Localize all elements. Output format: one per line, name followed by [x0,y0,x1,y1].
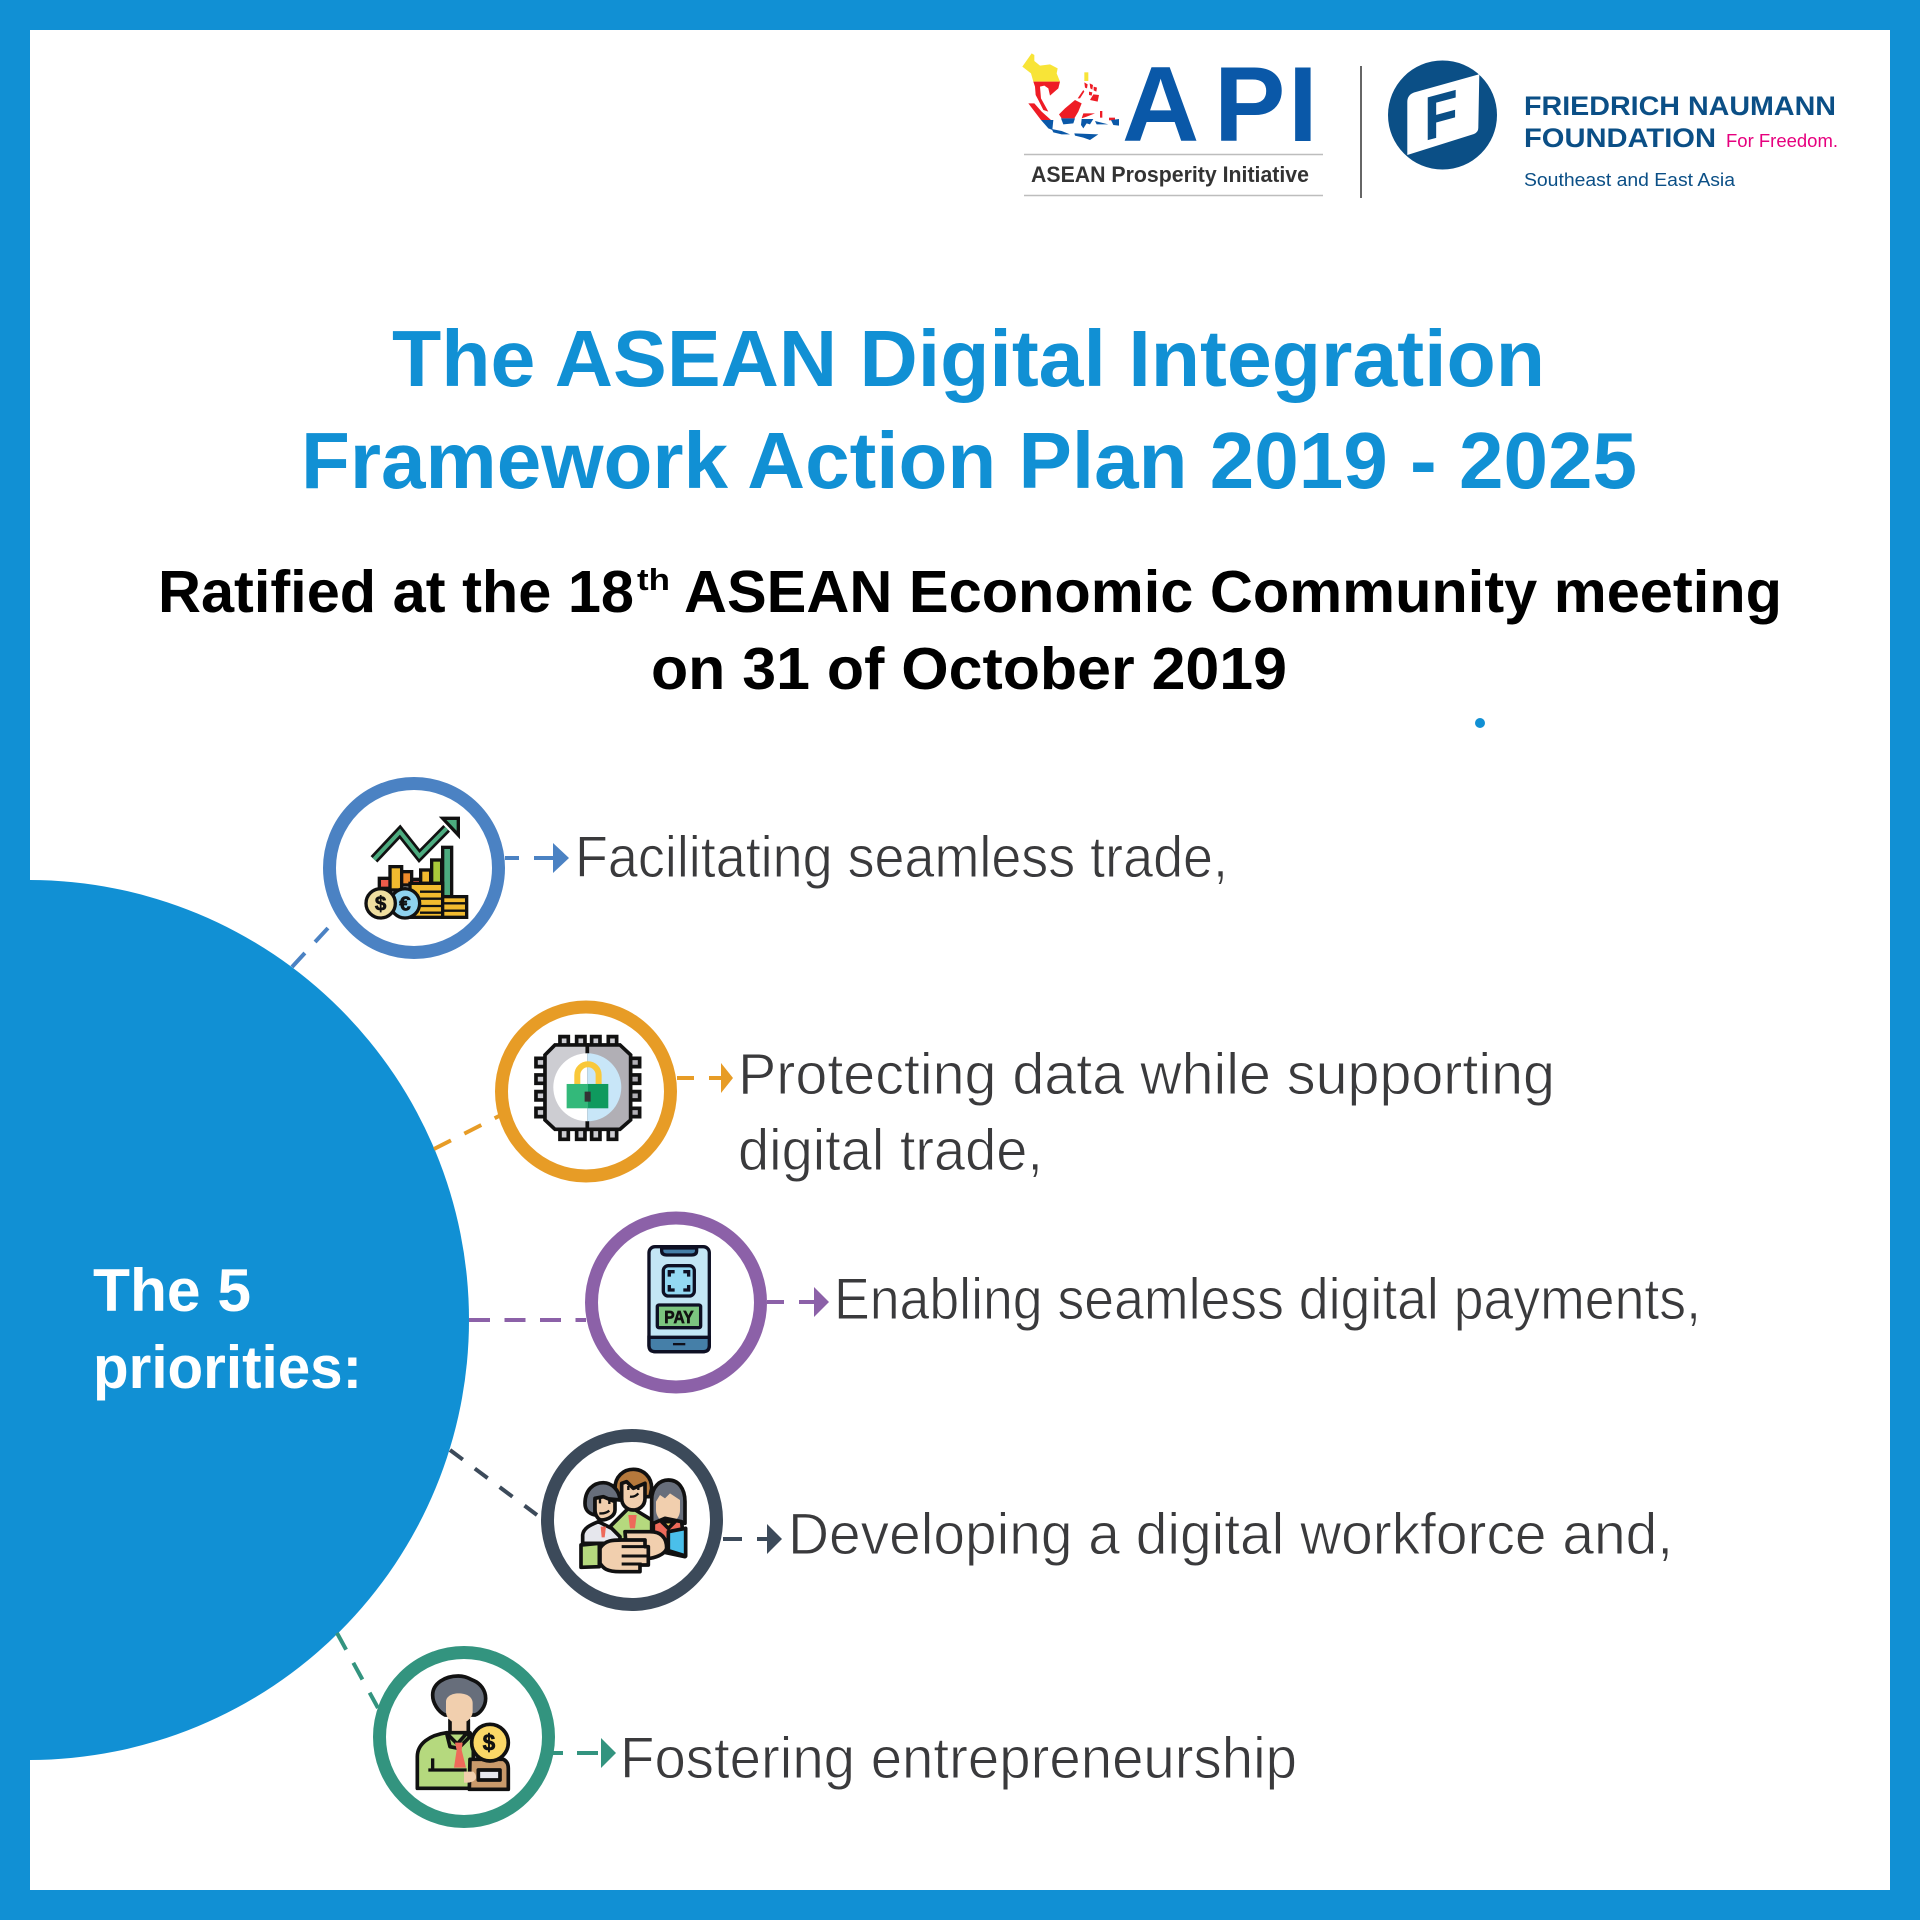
circle label [93,1257,362,1401]
logo: Friedrich Naumann Foundation [1388,60,1838,190]
priority 4: digital workforce [450,1436,1673,1604]
title [301,314,1637,505]
subtitle [158,559,1782,702]
title: The ASEAN Digital Integration [392,314,1545,403]
subtitle: Ratified at the 18 [158,559,634,625]
foundation name: FRIEDRICH NAUMANN [1524,91,1836,121]
text: priority 2: digital trade, [738,1118,1043,1183]
arrow [534,843,569,873]
title: Framework Action Plan 2019 - 2025 [301,416,1637,505]
priority 5: fostering entrepreneurship [337,1633,1297,1822]
subtitle: on 31 of October 2019 [651,636,1287,702]
arrow [721,1063,733,1093]
icon: growth chart and coins: $ [375,893,387,916]
logo: API ASEAN Prosperity Initiative [1022,44,1323,196]
subtitle: th [637,562,670,597]
priority 1: facilitating seamless trade [292,784,1228,967]
region: Southeast and East Asia [1524,169,1736,190]
icon: phone payment [649,1247,709,1352]
panel: the 5 priorities circle [0,880,469,1760]
icon: ASEAN map [1022,53,1119,140]
text: priority 1: Facilitating seamless trade, [575,825,1228,890]
icon: entrepreneur with coin: $ [483,1730,496,1756]
text: priority 5: Fostering entrepreneurship [620,1726,1297,1791]
priority 3: seamless digital payments [469,1218,1701,1387]
API wordmark: API [1122,44,1318,164]
icon: chip with padlock [536,1037,640,1139]
circle label: priorities: [93,1334,362,1401]
arrow [757,1524,782,1554]
API full name: ASEAN Prosperity Initiative [1031,162,1309,187]
priority 2: protecting data [434,1007,1555,1183]
arrow [601,1738,616,1768]
subtitle: ASEAN Economic Community meeting [684,559,1782,625]
text: priority 4: Developing a digital workforce and, [788,1502,1673,1567]
text: priority 2 [738,1042,1555,1183]
icon: FNF circle emblem [1388,60,1497,170]
icon: phone payment: PAY [664,1307,694,1327]
text: priority 3: Enabling seamless digital payments, [834,1267,1701,1332]
icon: growth chart and coins [366,818,467,918]
arrow [799,1287,829,1317]
icon: team shaking hands [581,1469,686,1572]
circle label: The 5 [93,1257,251,1324]
text: priority 2: Protecting data while supporting [738,1042,1555,1107]
icon: entrepreneur with coin [417,1676,508,1789]
icon: growth chart and coins: € [399,893,411,916]
tagline: For Freedom. [1726,130,1838,151]
logo: Friedrich Naumann Foundation: FOUNDATION [1524,123,1716,153]
icon: FNF circle emblem: F [1424,77,1457,154]
